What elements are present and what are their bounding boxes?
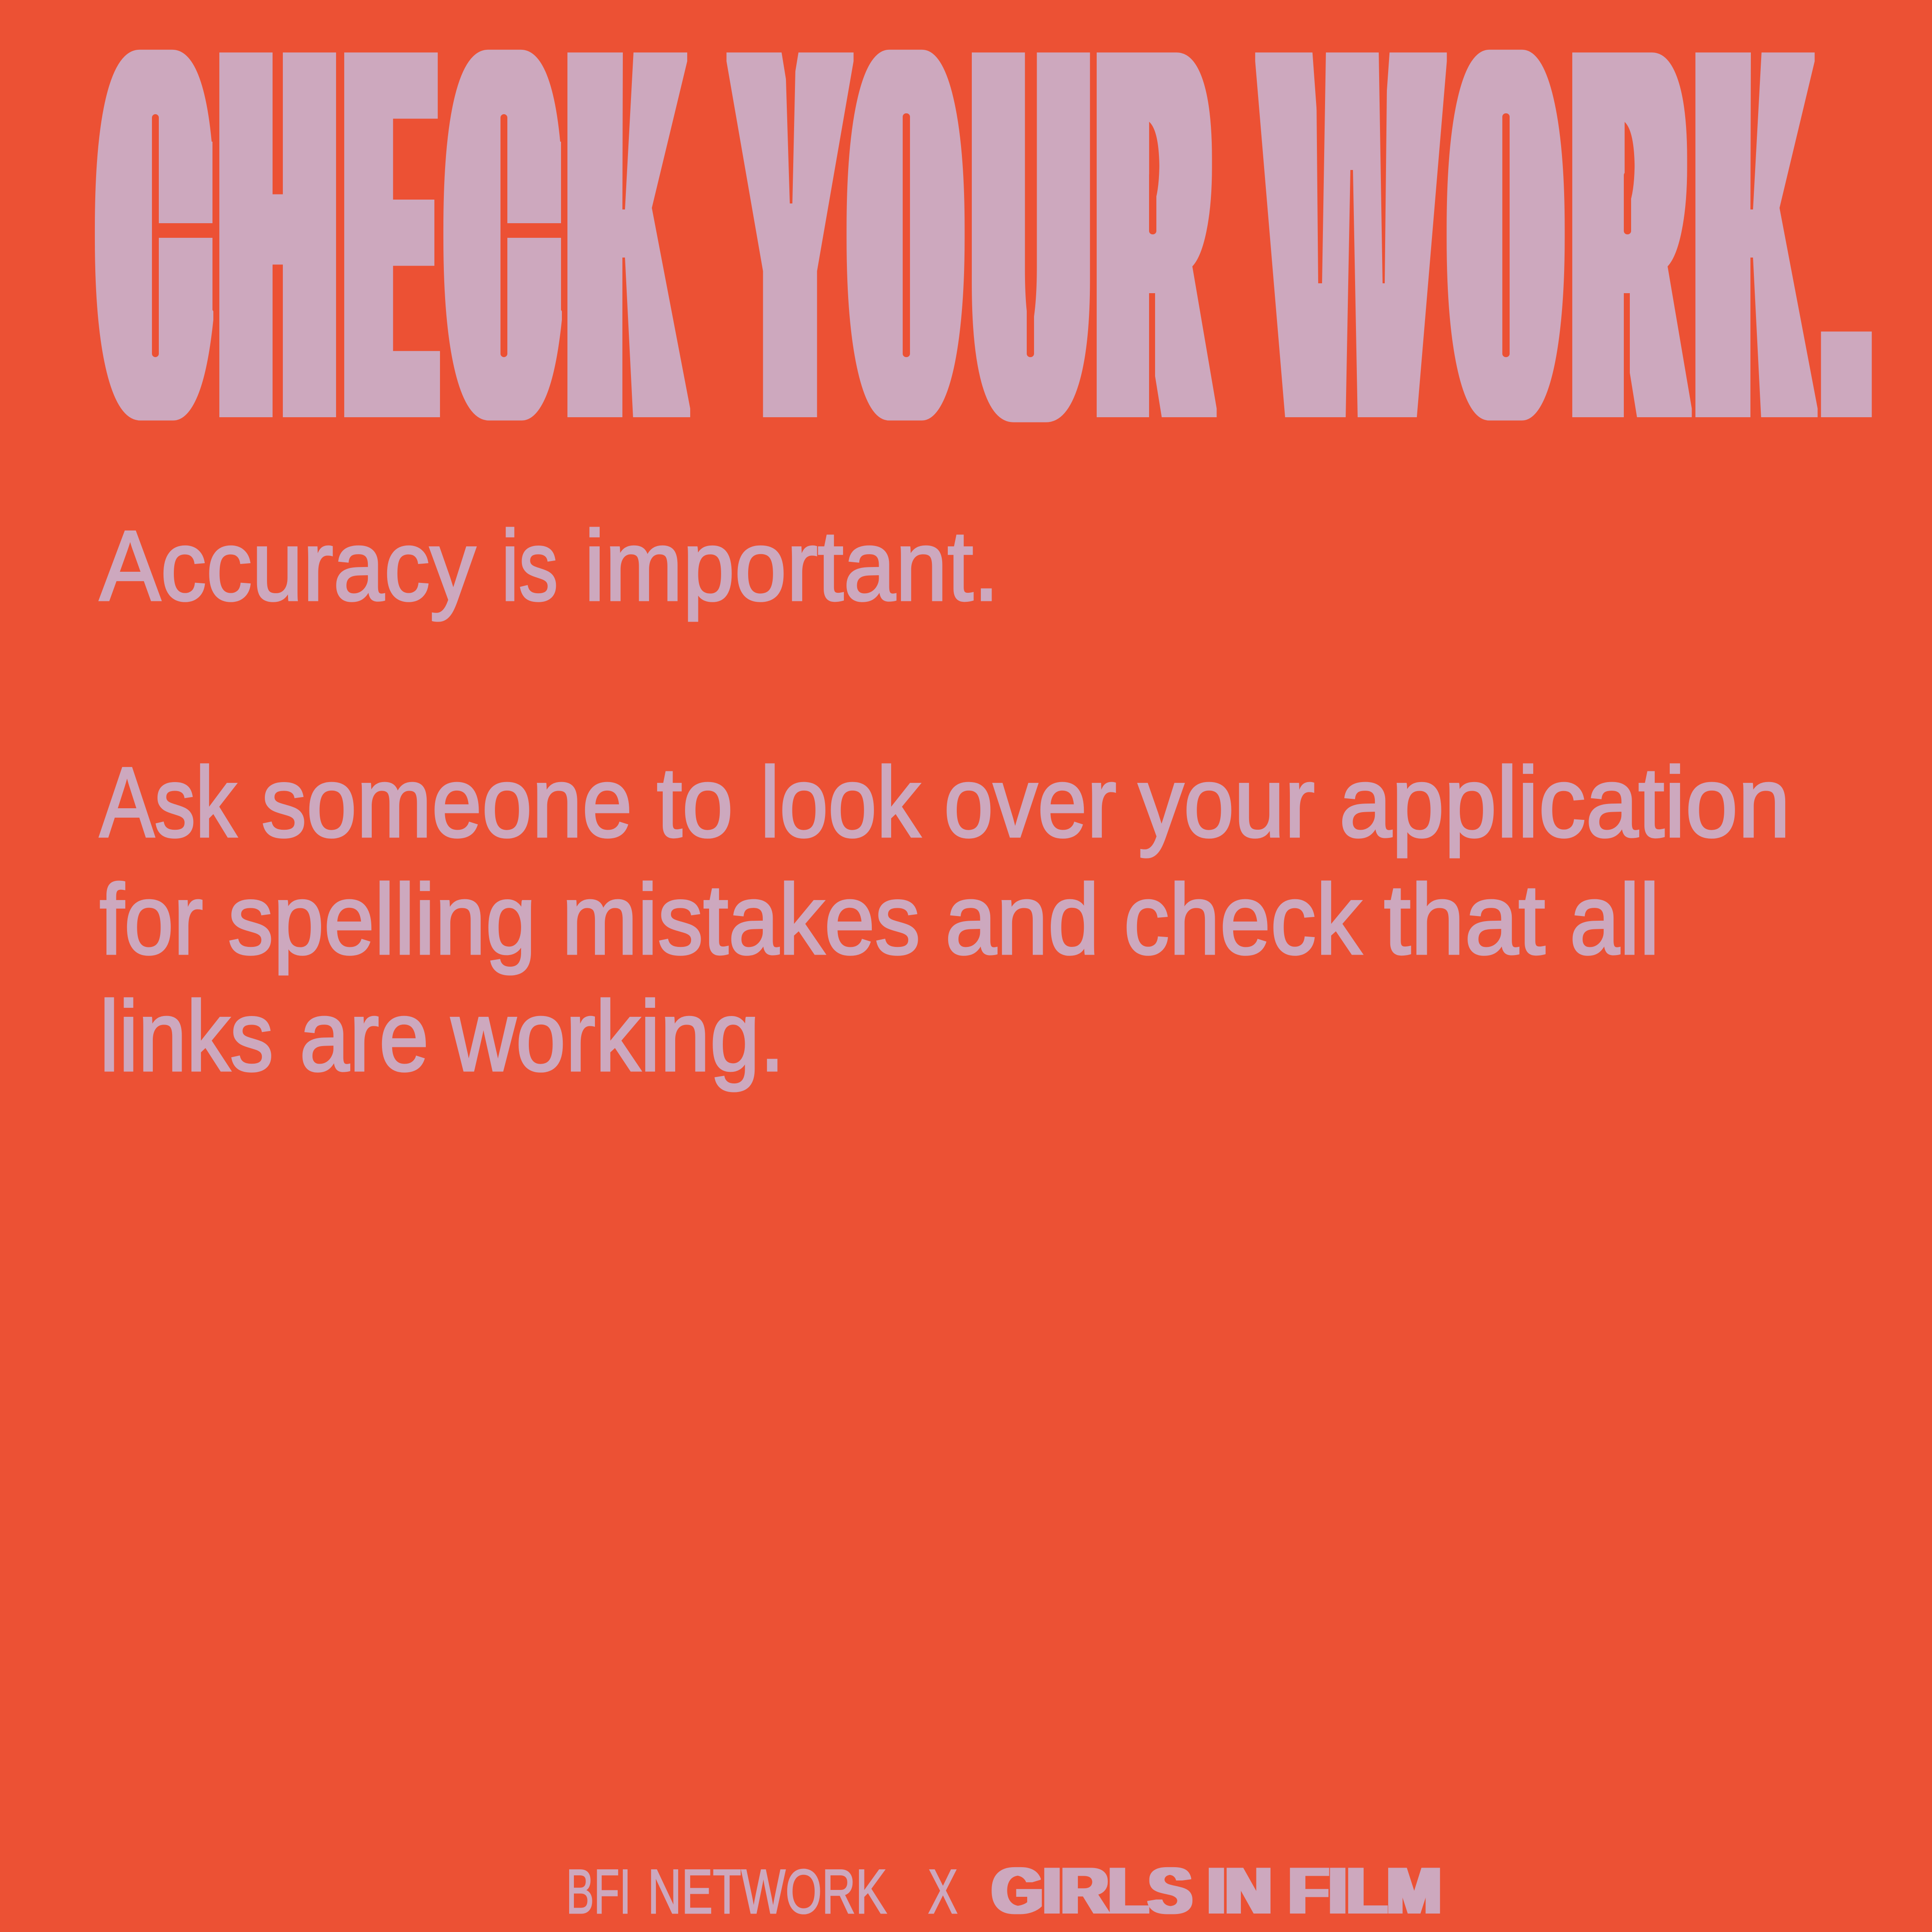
body line 3: are: [300, 981, 429, 1092]
footer separator x: X: [928, 1856, 958, 1926]
footer logo: Girls in Film: [992, 1854, 1441, 1927]
body line 2: for: [100, 864, 203, 975]
footer logo: Girls in Film: IN: [1207, 1854, 1272, 1927]
intro sentence: is: [501, 510, 558, 622]
title letters: [106, 0, 1864, 523]
body paragraph: [100, 747, 1790, 1092]
body line 2: and: [945, 864, 1099, 975]
body line 1: someone: [261, 747, 632, 858]
body line 1: over: [944, 747, 1116, 858]
body line 1: Ask: [100, 747, 237, 858]
title: [106, 0, 1864, 523]
body line 1: to: [657, 747, 733, 858]
footer logo: Girls in Film: GIRLS: [992, 1854, 1192, 1927]
body line 1: look: [760, 747, 921, 858]
body line 2: spelling: [228, 864, 536, 975]
body line 2: mistakes: [562, 864, 920, 975]
title letters K: [581, 0, 1797, 523]
footer logo: BFI Network: NETWORK: [648, 1856, 887, 1926]
body line 3: working.: [451, 981, 785, 1092]
intro sentence: Accuracy: [100, 510, 476, 622]
footer logo: BFI Network: BFI: [566, 1856, 631, 1926]
body line 2: that: [1384, 864, 1545, 975]
body line 2: check: [1124, 864, 1362, 975]
body line 3: links: [100, 981, 273, 1092]
title letter counters: [129, 52, 1762, 419]
body line 1: application: [1339, 747, 1790, 858]
body line 2: all: [1570, 864, 1659, 975]
intro sentence: important.: [584, 510, 999, 622]
footer logo: Girls in Film: FILM: [1289, 1854, 1441, 1927]
body line 1: your: [1138, 747, 1315, 858]
